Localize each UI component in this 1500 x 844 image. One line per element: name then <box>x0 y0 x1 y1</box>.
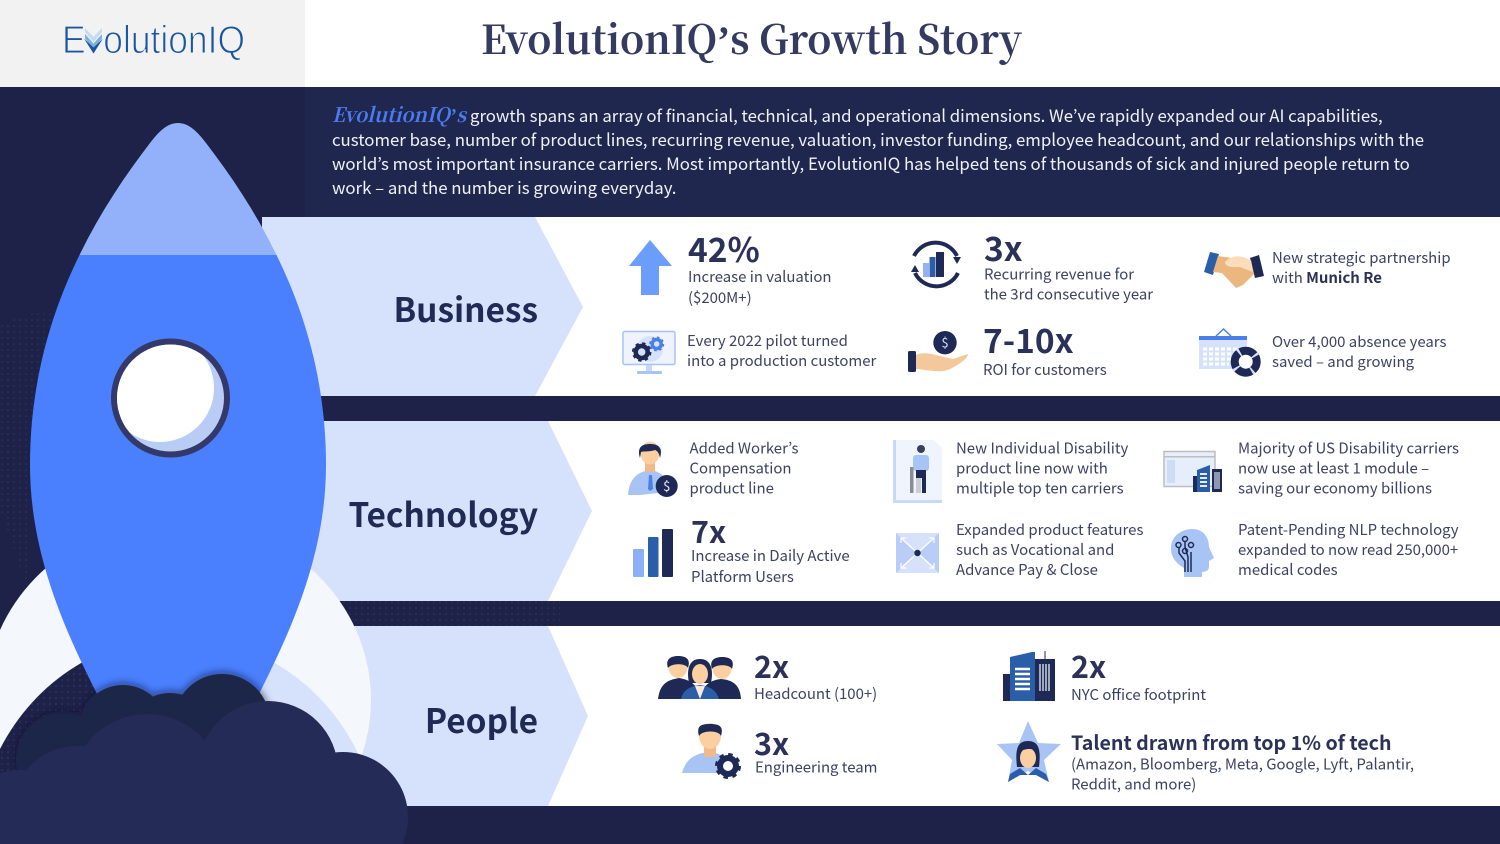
icon: monitor with gears <box>623 332 675 374</box>
panel: People <box>300 626 1500 806</box>
stat: 7-10x: 7-10x <box>983 314 1074 363</box>
stat: 2x headcount: Headcount (100+) <box>754 683 877 704</box>
logo: EvolutionIQ: EvolutionIQ <box>62 19 245 62</box>
icon: head with circuit <box>1171 529 1214 577</box>
stat: 7x: Platform Users <box>691 566 794 587</box>
title: EvolutionIQ’s Growth Story <box>481 9 1023 66</box>
intro text <box>332 99 1424 199</box>
text: Expanded features: Advance Pay & Close <box>956 559 1098 580</box>
text: Individual Disability: product line now with <box>956 458 1108 478</box>
text: pilots: Every 2022 pilot turned <box>687 330 848 351</box>
stat: 2x headcount: 2x <box>754 643 789 687</box>
heading: Business: Business <box>393 283 538 332</box>
text: pilots <box>687 330 876 371</box>
stat: 3x: 3x <box>984 222 1023 271</box>
text: Munich Re partnership <box>1272 247 1451 288</box>
text: absence years: saved – and growing <box>1272 351 1415 372</box>
stat: 2x office: NYC office footprint <box>1071 684 1206 705</box>
text: Majority of carriers: saving our economy billions <box>1238 478 1432 498</box>
text: absence years: Over 4,000 absence years <box>1272 331 1447 352</box>
header: white title band <box>305 0 1500 87</box>
icon: document with person on crutch <box>893 440 942 503</box>
text: pilots: into a production customer <box>687 350 876 371</box>
icon: star with woman <box>997 721 1061 782</box>
rocket nose <box>80 123 276 255</box>
icon: handshake <box>1204 252 1264 288</box>
text: Expanded features: Expanded product features <box>956 519 1143 540</box>
intro text: customer base, number of product lines, recurring revenue, valuation, investor funding, employee headcount, and our relationships with the <box>332 127 1424 151</box>
text: NLP technology: Patent-Pending NLP technology <box>1238 519 1459 540</box>
stat: 3x <box>984 222 1153 304</box>
intro text: EvolutionIQ’s <box>332 99 468 128</box>
text: Majority of carriers: now use at least 1 module – <box>1238 458 1429 478</box>
text: NLP technology: expanded to now read 250,000+ <box>1238 539 1458 560</box>
text: NLP technology <box>1238 519 1459 580</box>
icon: cycle chart <box>911 243 961 286</box>
intro panel <box>305 87 1500 217</box>
icon: engineer with gear <box>682 723 740 778</box>
launch smoke halo <box>0 519 380 844</box>
rocket window <box>106 334 227 454</box>
icon: person with dollar <box>628 442 678 497</box>
text: Worker's Compensation: Compensation <box>690 458 792 478</box>
text: Individual Disability: multiple top ten carriers <box>956 478 1124 498</box>
clouds <box>0 674 408 844</box>
intro text: work – and the number is growing everyday. <box>332 175 676 199</box>
text: Worker's Compensation <box>690 438 798 498</box>
stat: talent <box>1071 727 1414 794</box>
text: Individual Disability: New Individual Disability <box>956 438 1128 458</box>
text: Worker's Compensation: Added Worker’s <box>690 438 798 458</box>
stat: 7x <box>691 508 850 587</box>
stat: 7x: 7x <box>691 508 726 552</box>
icon: expand square <box>896 533 939 573</box>
intro text: world’s most important insurance carriers. Most importantly, EvolutionIQ has helped tens of thousands of sick and injured people return to <box>332 151 1410 175</box>
intro text: growth spans an array of financial, technical, and operational dimensions. We’ve rapidly expanded our AI capabilities, <box>470 103 1383 127</box>
icon: up arrow <box>629 240 672 295</box>
stat: 3x engineering: 3x <box>754 720 789 764</box>
text: absence years <box>1272 331 1447 372</box>
icon: bar chart <box>633 529 673 577</box>
stat: 2x office <box>1071 643 1206 705</box>
stat: 3x engineering <box>754 720 877 778</box>
stat: 42%: 42% <box>688 223 760 272</box>
heading: People: People <box>425 694 538 743</box>
text: Majority of carriers: Majority of US Disability carriers <box>1238 438 1459 458</box>
stat: 42% <box>688 223 831 308</box>
text: Munich Re partnership: with Munich Re <box>1272 267 1382 288</box>
heading: Technology: Technology <box>348 488 538 537</box>
stat: 2x office: 2x <box>1071 643 1106 687</box>
icon: team of three <box>658 656 741 699</box>
stat: talent: (Amazon, Bloomberg, Meta, Google, Lyft, Palantir, <box>1071 754 1414 774</box>
stat: 3x: Recurring revenue for <box>984 264 1134 284</box>
text: Majority of carriers <box>1238 438 1459 498</box>
header: logo panel <box>0 0 305 87</box>
panel: Technology <box>300 421 1500 601</box>
rocket <box>30 123 326 700</box>
stat: 3x: the 3rd consecutive year <box>984 284 1153 304</box>
icon: person with dollar: $ <box>663 476 670 495</box>
stat: 3x engineering: Engineering team <box>755 756 877 778</box>
panel: Business <box>262 217 1500 396</box>
text: NLP technology: medical codes <box>1238 559 1338 580</box>
stat: 7-10x <box>983 314 1107 380</box>
text: Individual Disability <box>956 438 1128 498</box>
stat: talent: Reddit, and more) <box>1071 774 1196 794</box>
icon: calendar with ring <box>1199 329 1257 373</box>
text: Worker's Compensation: product line <box>690 478 774 498</box>
rocket body <box>30 255 326 700</box>
icon: hand with coin <box>908 331 968 372</box>
text: Munich Re partnership: New strategic partnership <box>1272 247 1451 268</box>
text: Expanded features <box>956 519 1143 580</box>
icon: office buildings <box>1003 651 1055 701</box>
stat: 7x: Increase in Daily Active <box>691 545 850 566</box>
stat: 7-10x: ROI for customers <box>983 359 1107 380</box>
text: Expanded features: such as Vocational and <box>956 539 1114 560</box>
stat: 2x headcount <box>754 643 877 704</box>
stat: talent: Talent drawn from top 1% of tech <box>1071 727 1392 756</box>
icon: hand with coin: $ <box>941 332 949 352</box>
stat: 42%: ($200M+) <box>688 287 752 308</box>
icon: window with buildings <box>1164 452 1222 492</box>
stat: 42%: Increase in valuation <box>688 266 831 287</box>
